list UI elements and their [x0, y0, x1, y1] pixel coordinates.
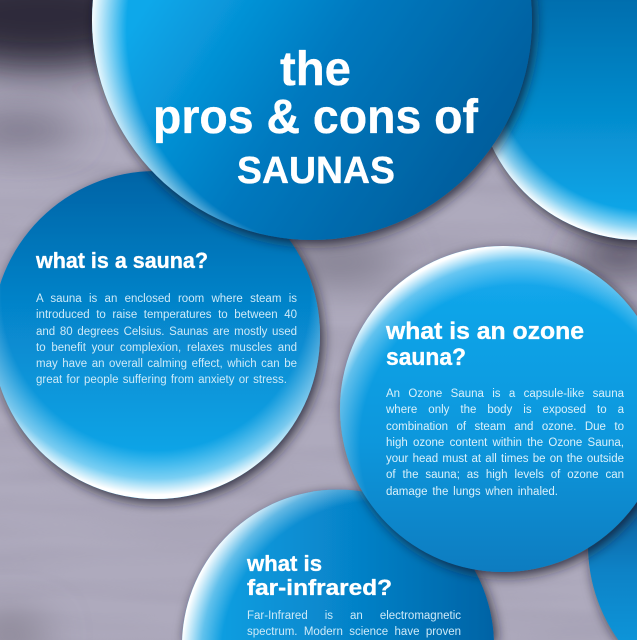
text: far-infrared description: spectrum. Modern science have proven [247, 626, 461, 638]
heading: what is far-infrared: what is [246, 551, 322, 576]
text: sauna description [36, 291, 297, 391]
heading: what is an ozone sauna: what is an ozone [385, 318, 584, 345]
title: the [280, 43, 351, 96]
text: ozone sauna description [386, 386, 624, 502]
panel: what is far-infrared [182, 490, 494, 640]
text: ozone sauna description: where only the body is exposed to a [386, 404, 624, 416]
text: sauna description: A sauna is an enclosed room where steam is [36, 293, 297, 305]
circle: bottom right [588, 425, 640, 640]
title: pros & cons of [153, 91, 479, 144]
text: sauna description: to benefit your complexion, relaxes muscles and [36, 342, 297, 354]
text: ozone sauna description: your head must at all times be on the outside [386, 453, 624, 465]
heading: what is far-infrared: far-infrared? [247, 575, 392, 600]
text: far-infrared description: Far-Infrared is an electromagnetic [247, 610, 461, 622]
text: sauna description: great for people suffering from anxiety or stress. [36, 374, 287, 386]
text: sauna description: introduced to raise temperatures to between 40 [36, 309, 297, 321]
heading: what is a sauna: what is a sauna? [35, 248, 208, 273]
title [153, 43, 479, 192]
title: SAUNAS [237, 150, 395, 192]
text: sauna description: and 80 degrees Celsius. Saunas are mostly used [36, 326, 297, 338]
text: ozone sauna description: damage the lungs when inhaled. [386, 486, 558, 498]
text: sauna description: may have an overall calming effect, which can be [36, 358, 297, 370]
panel: what is a sauna [0, 171, 320, 499]
text: ozone sauna description: of the sauna; as high levels of ozone can [386, 469, 624, 481]
panel: what is an ozone sauna [340, 246, 640, 572]
text: ozone sauna description: high ozone content within the Ozone Sauna, [386, 437, 624, 449]
panel: title circle [92, 0, 532, 240]
text: ozone sauna description: An Ozone Sauna is a capsule-like sauna [386, 388, 624, 400]
text: ozone sauna description: combination of steam and ozone. Due to [386, 421, 624, 433]
heading: what is an ozone sauna: sauna? [386, 344, 466, 371]
text: far-infrared description [247, 608, 461, 640]
circle: top right [476, 0, 640, 240]
